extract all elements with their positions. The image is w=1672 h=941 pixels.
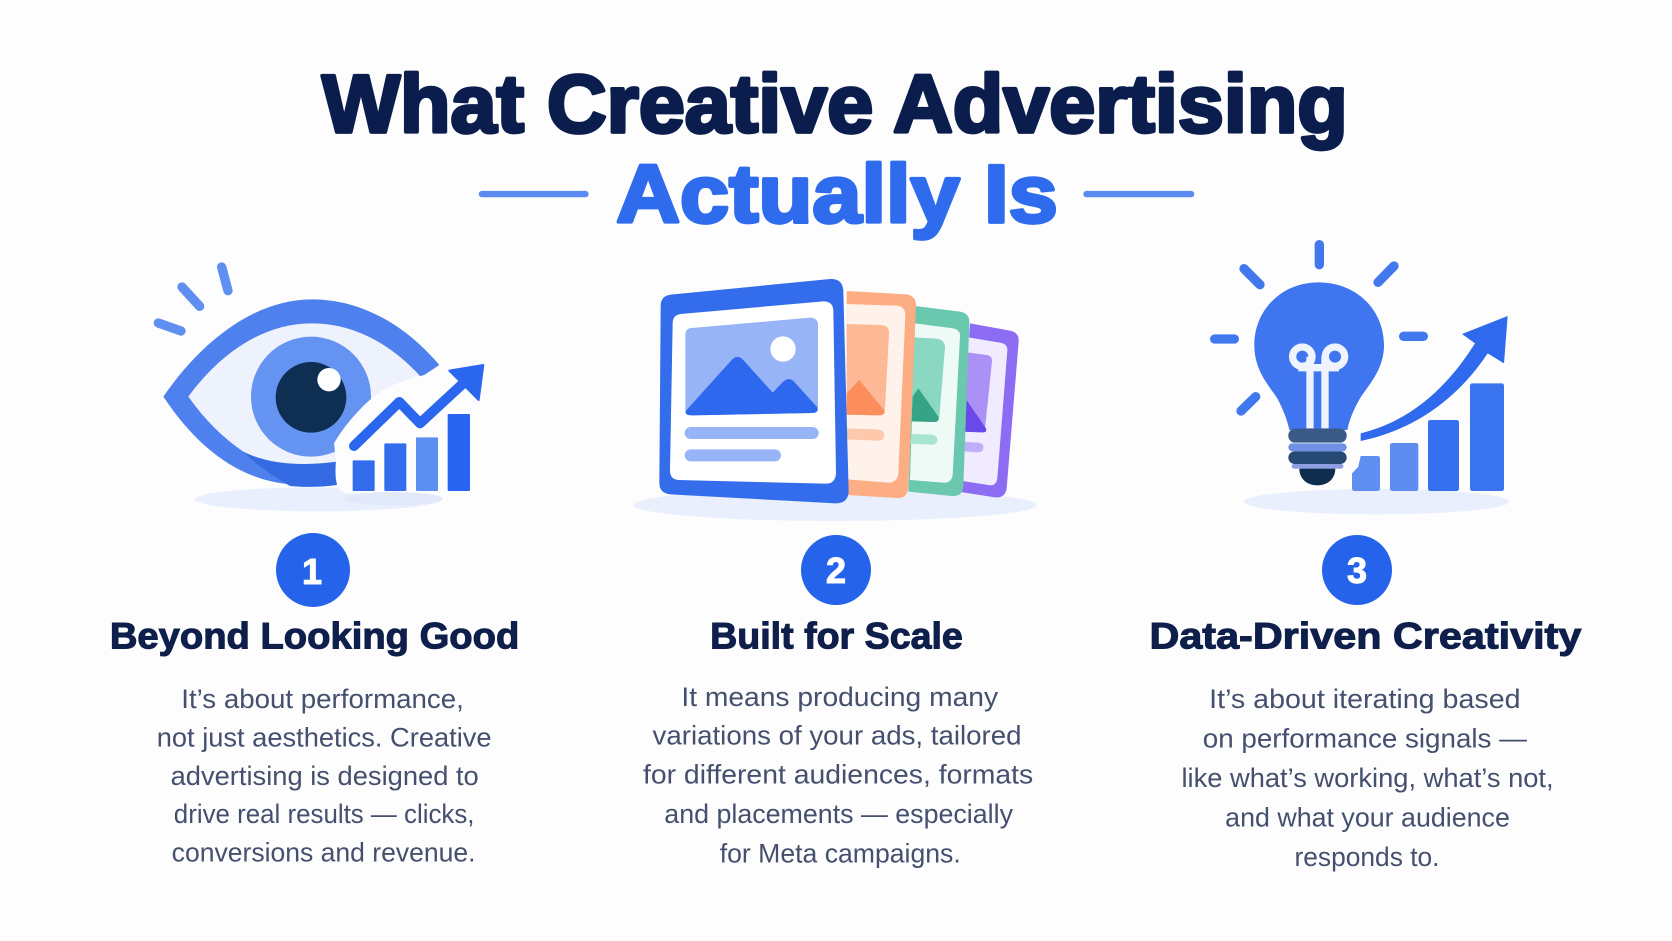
body text 1: It’s about performance, (181, 684, 464, 714)
body text 3 (1181, 684, 1554, 872)
panel: built for scale (633, 279, 1037, 869)
panel: data-driven creativity (1149, 245, 1582, 872)
body text 1: not just aesthetics. Creative (157, 722, 492, 752)
body text 2 (643, 682, 1033, 869)
icon: stacked ad cards (633, 279, 1037, 521)
body text 1: advertising is designed to (171, 761, 479, 791)
body text 3: on performance signals — (1203, 723, 1527, 753)
blue card (659, 279, 849, 503)
body text 2: variations of your ads, tailored (653, 720, 1022, 750)
number badge 1 (276, 533, 350, 607)
body text 3: and what your audience (1225, 802, 1510, 832)
orange card (847, 291, 916, 498)
number badge 3 (1322, 535, 1392, 605)
title (322, 59, 1348, 240)
purple card (958, 323, 1019, 497)
icon: light bulb with growth chart (1215, 245, 1509, 514)
body text 3: like what’s working, what’s not, (1181, 763, 1554, 793)
title line 1: What Creative Advertising (322, 59, 1348, 150)
body text 3: responds to. (1294, 842, 1440, 872)
number badge 3: 3 (1347, 550, 1367, 591)
number badge 2 (801, 535, 871, 605)
body text 1: conversions and revenue. (172, 838, 476, 868)
green card (908, 306, 969, 496)
title line 2 (479, 149, 1194, 240)
heading: data-driven creativity: Data-Driven Creativity (1149, 614, 1582, 656)
body text 1: drive real results — clicks, (174, 799, 475, 829)
body text 1 (157, 684, 492, 868)
heading: beyond looking good: Beyond Looking Good (110, 614, 519, 656)
body text 2: for Meta campaigns. (720, 839, 961, 869)
number badge 2: 2 (826, 550, 846, 591)
body text 3: It’s about iterating based (1209, 684, 1521, 714)
body text 2: and placements — especially (664, 799, 1014, 829)
panel: beyond looking good (110, 267, 519, 868)
title line 2: Actually Is (616, 149, 1058, 240)
body text 2: It means producing many (681, 682, 999, 712)
icon: eye with growth chart (158, 267, 492, 511)
body text 2: for different audiences, formats (643, 760, 1033, 790)
heading: built for scale: Built for Scale (710, 614, 963, 656)
number badge 1: 1 (302, 551, 322, 592)
